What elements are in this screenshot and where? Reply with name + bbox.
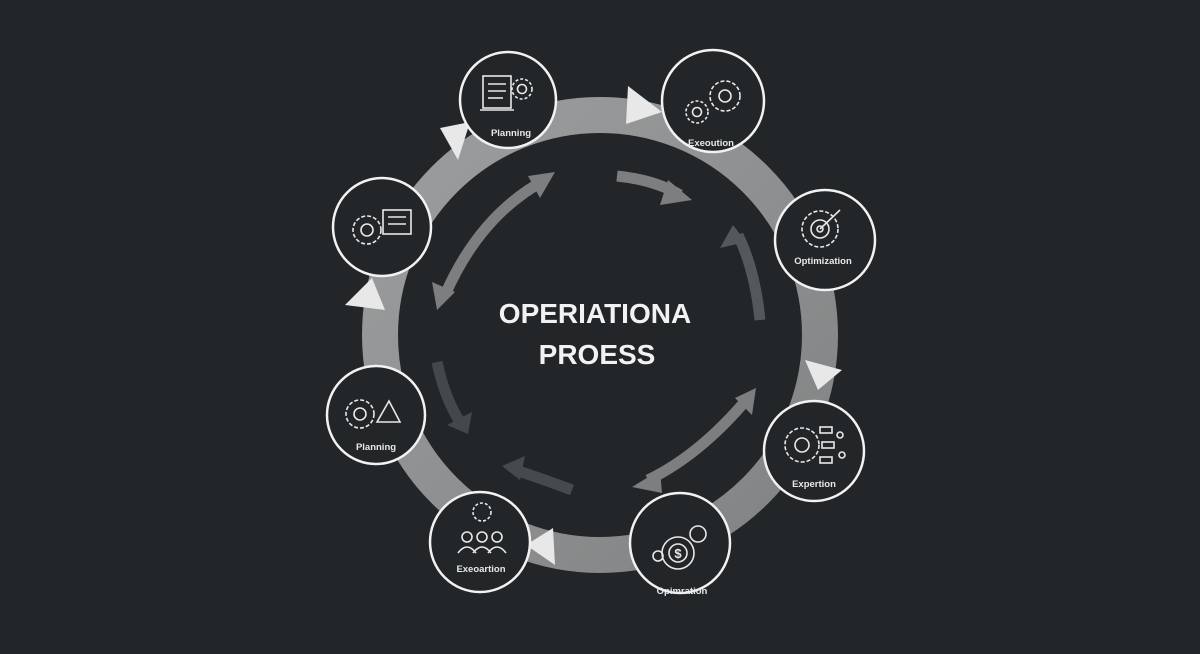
- labels: Exeoution: [688, 138, 734, 149]
- labels: [356, 128, 852, 597]
- title: OPERIATIONA: [499, 298, 691, 329]
- labels: Expertion: [792, 479, 836, 490]
- ring arrowheads: [345, 86, 842, 565]
- text: $: [674, 546, 682, 561]
- icons (simplified gears/docs): [346, 76, 845, 569]
- labels: Optimization: [794, 256, 852, 267]
- inner arrows: [437, 176, 760, 490]
- nodes: [327, 50, 875, 593]
- labels: Planning: [491, 128, 531, 139]
- labels: Opimration: [657, 586, 708, 597]
- title: PROESS: [539, 339, 655, 370]
- outer ring: [380, 115, 820, 555]
- labels: Planning: [356, 442, 396, 453]
- title: [499, 298, 691, 370]
- labels: Exeoartion: [456, 564, 506, 575]
